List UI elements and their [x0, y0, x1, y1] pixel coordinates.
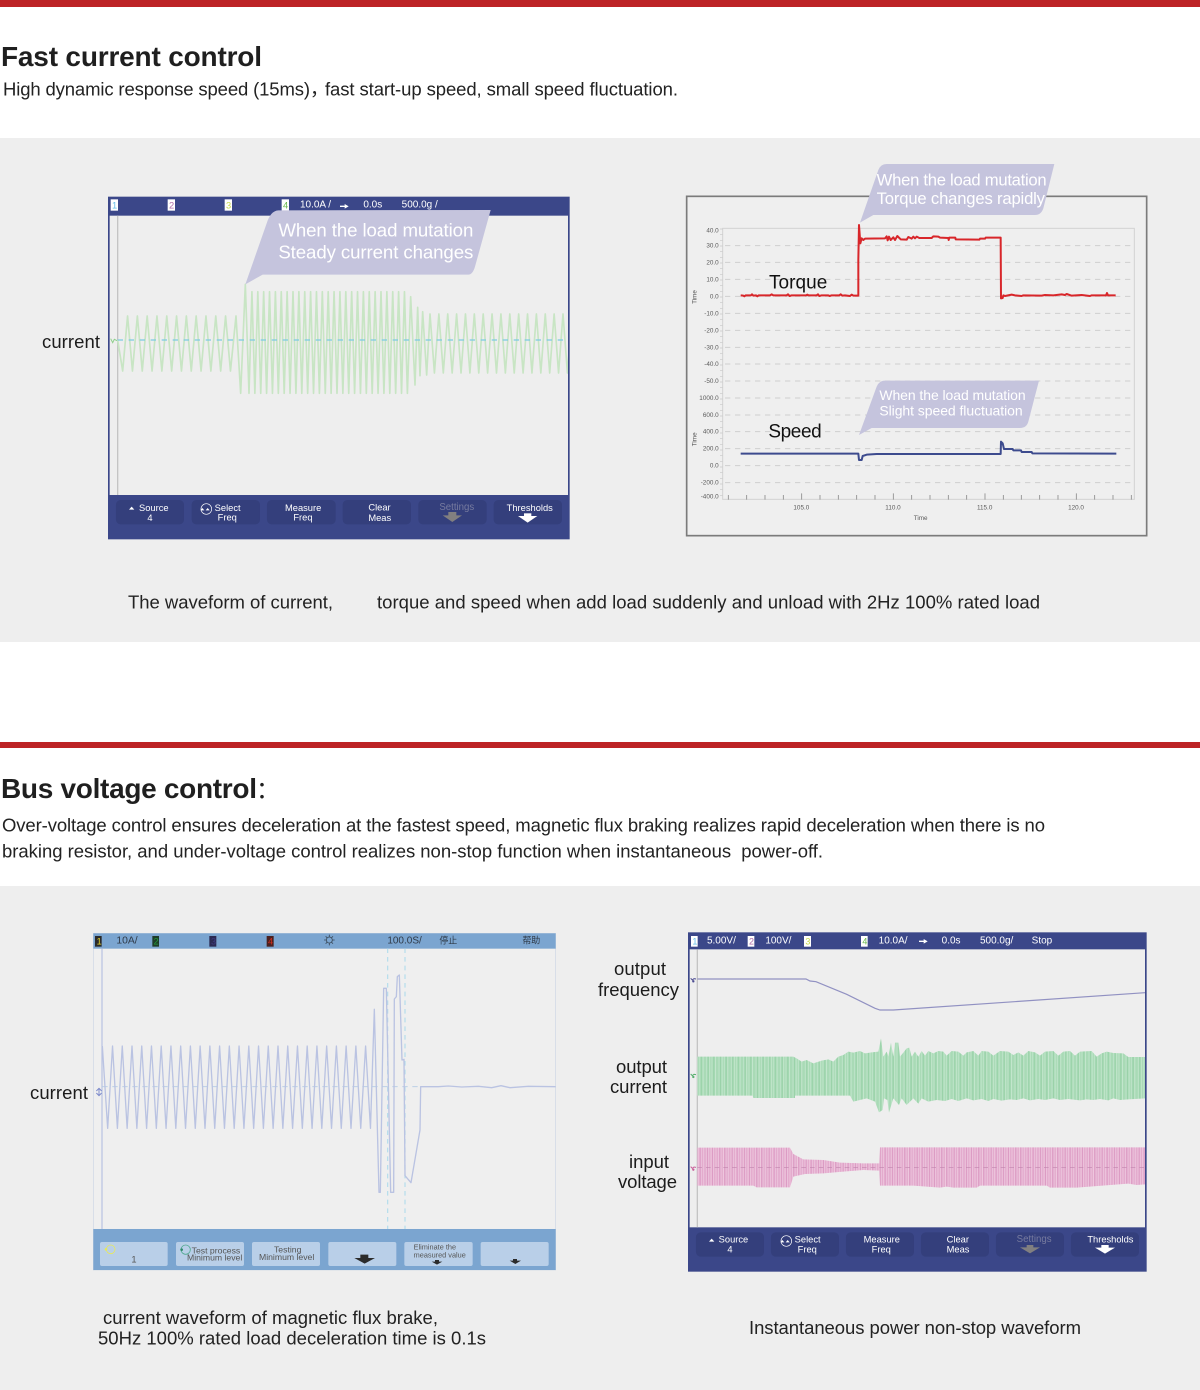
y axis tick labels: 20.0: [706, 259, 719, 266]
scope top bar readout: 10.0A/: [879, 936, 908, 947]
scope top bar readout: 4: [268, 937, 273, 947]
scope soft buttons: Settings: [439, 502, 474, 513]
scope top bar readout: 4: [283, 201, 288, 211]
y axis tick labels: -50.0: [704, 378, 719, 385]
callout: torque changes rapidly: [860, 164, 1054, 223]
y axis tick labels: 40.0: [706, 227, 719, 234]
scope top bar readout: 3: [211, 937, 216, 947]
scope soft buttons: Freq: [872, 1245, 891, 1255]
y axis tick labels: -40.0: [704, 361, 719, 368]
caption: torque and speed: torque and speed when add load suddenly and unload with 2Hz 100% rated load: [377, 592, 1040, 612]
x axis tick labels: 110.0: [885, 504, 901, 511]
text: bus voltage description: Over-voltage control ensures deceleration at the fastest speed, magnetic flux braking realizes rapid deceleration when there is no: [2, 814, 1045, 836]
scope top bar readout: 4: [862, 937, 867, 947]
label: input voltage: voltage: [618, 1171, 677, 1192]
line: output frequency: [697, 979, 1145, 1010]
scope soft buttons: Thresholds: [1087, 1235, 1134, 1245]
y axis tick labels: 0.0: [710, 463, 719, 470]
text: fast current control description: ，: [310, 78, 329, 100]
line: speed: [741, 442, 1116, 460]
scope soft buttons: Clear: [368, 503, 391, 513]
text: fast current control description: High dynamic response speed (15ms): [3, 78, 310, 100]
scope soft buttons: Testing: [274, 1245, 302, 1255]
y axis tick labels: 30.0: [706, 243, 719, 250]
second red bar: [0, 742, 1200, 748]
scope top bar readout: 停止: [439, 935, 457, 946]
text: bus voltage description: [2, 814, 1045, 862]
scope top bar readout: [95, 935, 540, 947]
y axis tick labels: 200.0: [703, 446, 719, 453]
scope soft buttons: Minimum level: [187, 1253, 242, 1263]
text: fast current control description: fast start-up speed, small speed fluctuation.: [325, 78, 678, 100]
label: input voltage: input: [629, 1151, 669, 1172]
scope top bar readout: Stop: [1032, 936, 1053, 947]
scope soft buttons: Eliminate the: [414, 1242, 456, 1251]
waveform: output current: [697, 1038, 1145, 1113]
callout: torque changes rapidly: When the load mutation: [877, 171, 1047, 190]
scope top bar readout: 500.0g /: [402, 200, 438, 211]
heading: bus voltage control: ：: [256, 777, 280, 804]
y axis tick labels: -20.0: [704, 327, 719, 334]
scope top bar readout: 0.0s: [363, 200, 382, 211]
label: output current: current: [610, 1076, 667, 1097]
label: current: current: [30, 1082, 88, 1103]
y axis tick labels: -30.0: [704, 344, 719, 351]
scope top bar readout: 100V/: [765, 936, 792, 947]
scope soft buttons: Freq: [293, 512, 313, 522]
scope soft buttons: Source: [139, 503, 169, 513]
waveform: current trace: [118, 284, 572, 393]
scope soft buttons: 1: [131, 1255, 137, 1265]
scope top bar readout: 1: [692, 937, 697, 947]
heading: bus voltage control: Bus voltage control: [1, 773, 257, 804]
caption: magnetic flux brake: 50Hz 100% rated load deceleration time is 0.1s: [98, 1328, 486, 1348]
scope soft buttons: [696, 1232, 1139, 1257]
scope top bar readout: 0.0s: [942, 936, 961, 947]
scope soft buttons: Measure: [864, 1235, 900, 1245]
caption: magnetic flux brake: current waveform of magnetic flux brake,: [103, 1307, 438, 1328]
scope top bar readout: 1: [97, 937, 102, 947]
scope soft buttons: Select: [795, 1235, 821, 1245]
y axis tick labels: 0.0: [710, 293, 719, 300]
scope soft buttons: Meas: [947, 1245, 970, 1255]
caption: instantaneous power non-stop: Instantaneous power non-stop waveform: [749, 1317, 1081, 1338]
text: fast current control description: [3, 78, 678, 100]
waveform: brake current trace: [102, 975, 556, 1192]
x axis tick labels: 115.0: [977, 504, 993, 511]
y axis tick labels: 600.0: [703, 412, 719, 419]
oscilloscope: magnetic flux brake current: [93, 933, 556, 1270]
scope soft buttons: [100, 1242, 549, 1266]
scope top bar readout: 3: [805, 937, 810, 947]
callout: torque changes rapidly: Torque changes rapidly: [877, 189, 1046, 208]
oscilloscope: current waveform: [108, 197, 572, 539]
heading: fast current control: Fast current control: [1, 41, 262, 72]
y axis tick labels: 10.0: [706, 276, 719, 283]
scope soft buttons: Select: [215, 503, 241, 513]
scope soft buttons: Thresholds: [507, 503, 553, 513]
scope soft buttons: Clear: [947, 1234, 969, 1244]
x axis tick labels: 105.0: [793, 504, 810, 511]
scope soft buttons: Source: [719, 1235, 748, 1245]
caption: current waveform: The waveform of current,: [128, 592, 333, 612]
scope soft buttons: Freq: [218, 513, 237, 523]
caption: magnetic flux brake: [98, 1307, 486, 1348]
scope soft buttons: measured value: [414, 1251, 466, 1260]
waveform: input voltage: [697, 1147, 1145, 1188]
label: speed: Speed: [768, 422, 822, 443]
y axis tick labels: 1000.0: [699, 395, 719, 402]
scope soft buttons: 4: [147, 513, 153, 523]
line: torque: [741, 225, 1116, 298]
scope soft buttons: Meas: [368, 513, 391, 523]
scope top bar readout: [111, 199, 438, 211]
callout: slight speed fluctuation: [859, 381, 1039, 435]
callout: steady current changes: When the load mutation: [278, 220, 473, 241]
y axis tick labels: -200.0: [701, 480, 719, 487]
y axis tick labels: [699, 227, 719, 500]
y axis tick labels: 400.0: [703, 429, 719, 436]
scope top bar readout: 2: [154, 937, 159, 947]
text: bus voltage description: braking resistor, and under-voltage control realizes non-stop function when instantaneous power-off.: [2, 840, 823, 862]
scope top bar readout: 3: [226, 201, 231, 211]
scope top bar readout: [691, 936, 1053, 947]
chart: torque and speed: [687, 164, 1147, 536]
label: input voltage: [618, 1151, 677, 1192]
label: output current: output: [616, 1056, 667, 1077]
x axis tick labels: Time: [692, 290, 699, 304]
scope soft buttons: Measure: [285, 503, 321, 513]
callout: steady current changes: [245, 210, 491, 284]
label: current: current: [42, 331, 100, 352]
label: output frequency: [598, 958, 680, 1000]
panel: fast current control background: [0, 138, 1200, 642]
scope top bar readout: 10.0A /: [300, 200, 331, 211]
top red bar: [0, 0, 1200, 7]
scope top bar readout: 帮助: [522, 935, 540, 946]
scope soft buttons: Settings: [1017, 1234, 1052, 1245]
label: output frequency: frequency: [598, 979, 680, 1000]
callout: slight speed fluctuation: Slight speed fluctuation: [879, 403, 1023, 419]
oscilloscope: power non-stop waveform: [688, 932, 1147, 1272]
x axis tick labels: 120.0: [1068, 504, 1084, 511]
scope top bar readout: 500.0g/: [980, 936, 1014, 947]
callout: steady current changes: Steady current changes: [278, 241, 473, 262]
scope top bar readout: 10A/: [116, 936, 138, 947]
x axis tick labels: Time: [692, 432, 699, 446]
scope soft buttons: Test process: [192, 1245, 241, 1255]
scope top bar readout: 1: [112, 201, 117, 211]
scope top bar readout: 2: [749, 937, 754, 947]
scope top bar readout: 5.00V/: [707, 936, 736, 947]
scope soft buttons: Minimum level: [259, 1252, 314, 1262]
scope soft buttons: Freq: [798, 1245, 817, 1255]
y axis tick labels: -400.0: [701, 493, 719, 500]
scope soft buttons: [116, 500, 562, 524]
label: output frequency: output: [614, 958, 666, 979]
y axis tick labels: -10.0: [704, 310, 719, 317]
label: output current: [610, 1056, 667, 1097]
panel: bus voltage control background: [0, 886, 1200, 1390]
scope soft buttons: 4: [727, 1245, 733, 1255]
x axis tick labels: Time: [914, 515, 928, 522]
x axis tick labels: [692, 290, 1084, 522]
scope top bar readout: 100.0S/: [387, 936, 422, 947]
callout: slight speed fluctuation: When the load mutation: [879, 387, 1026, 403]
label: torque: Torque: [769, 272, 827, 293]
scope top bar readout: 2: [169, 201, 174, 211]
